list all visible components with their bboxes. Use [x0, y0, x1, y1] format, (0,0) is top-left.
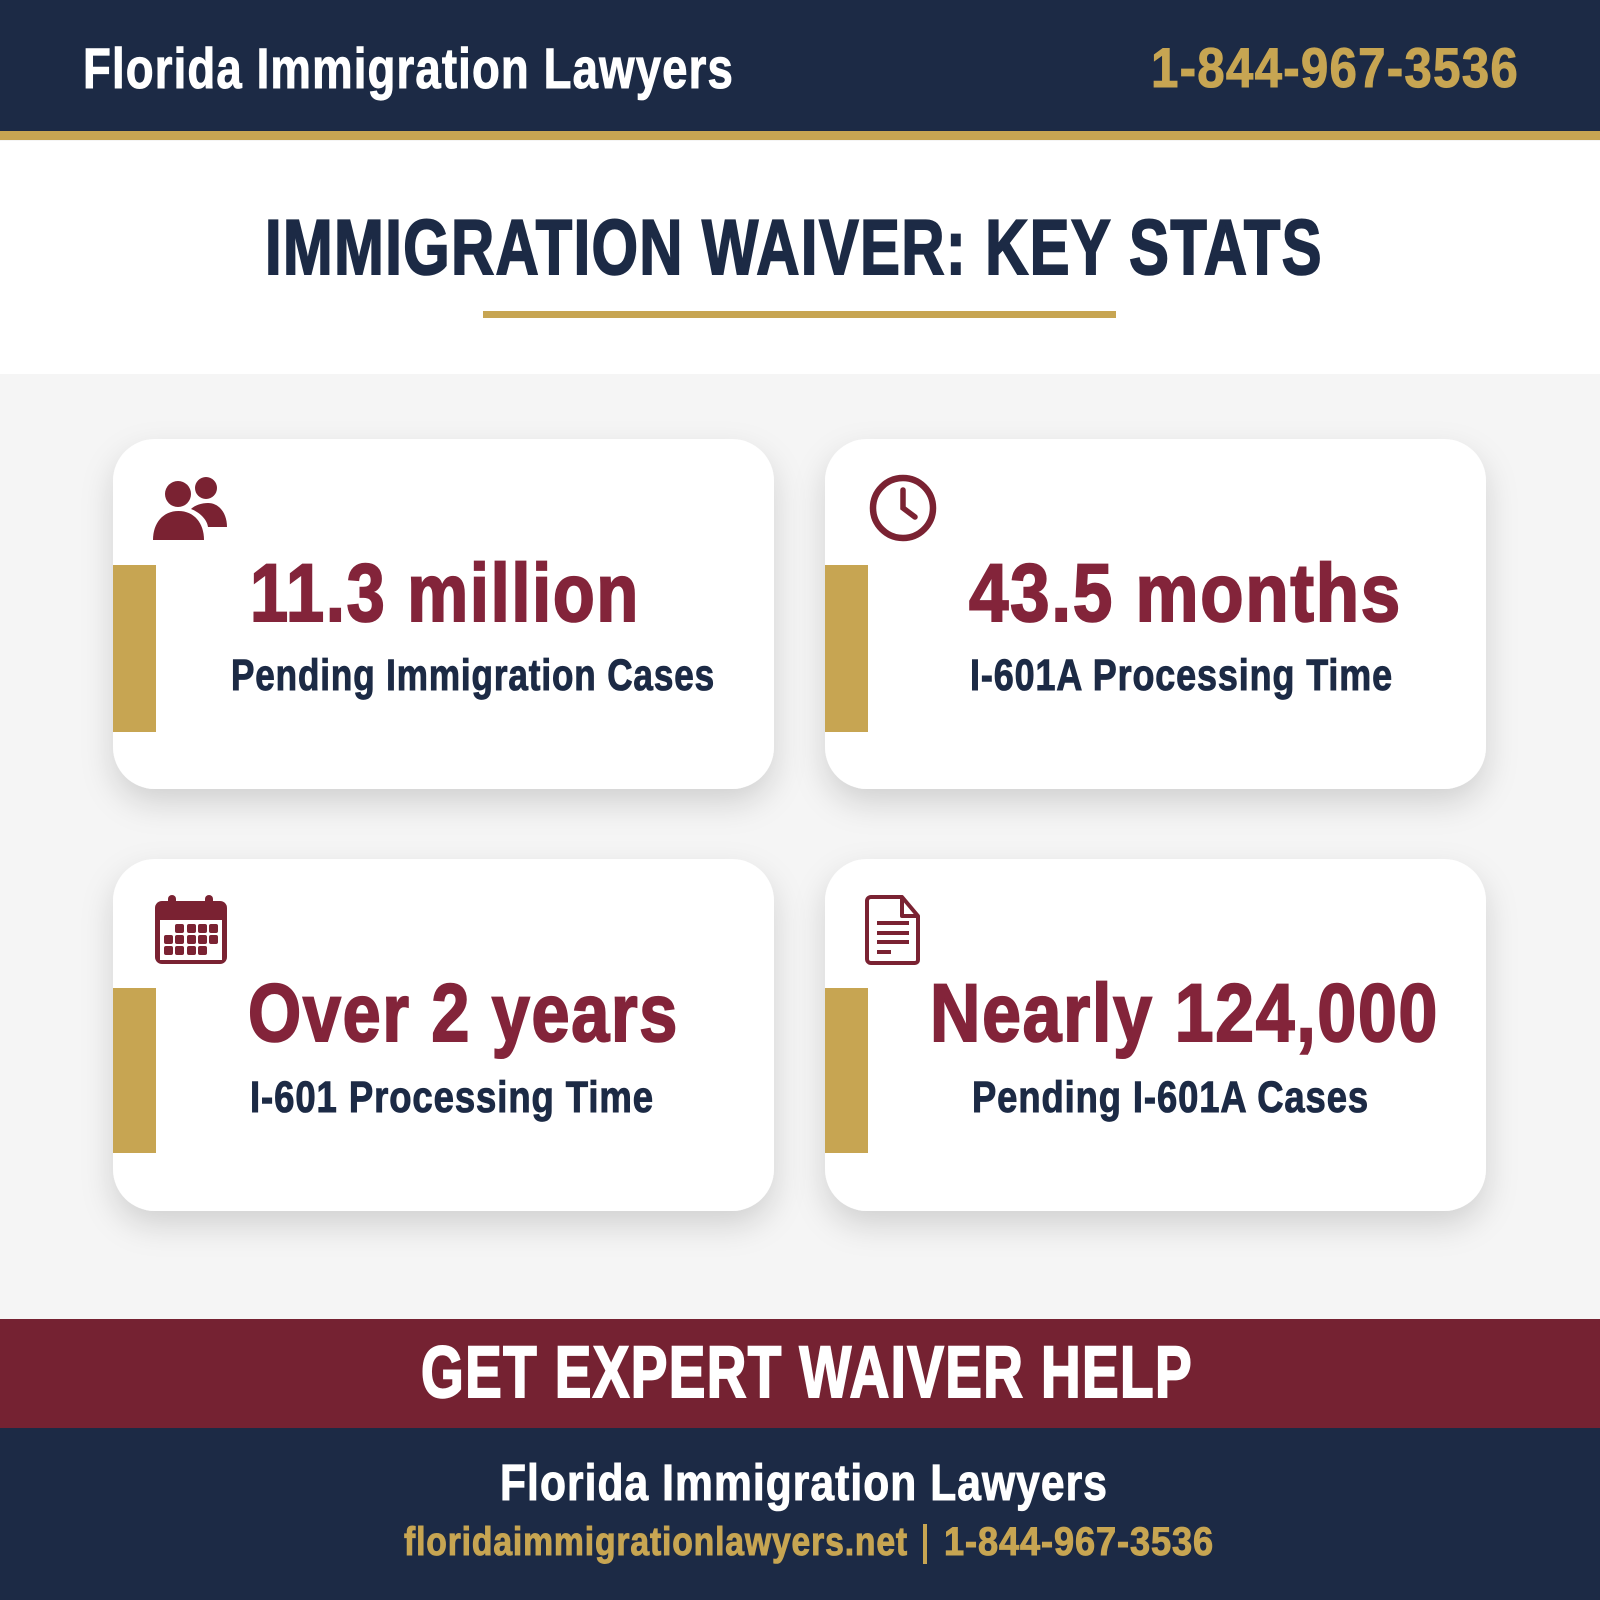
- footer: [0, 1428, 1600, 1600]
- stat label: I-601 Processing Time: [250, 1073, 654, 1122]
- panel: I-601A processing time: [825, 439, 1486, 789]
- title underline: [483, 311, 1116, 318]
- icon: document: [867, 897, 918, 963]
- panel: pending I-601A cases: [825, 859, 1486, 1211]
- gold accent bar: [825, 988, 868, 1153]
- gold accent bar: [113, 988, 156, 1153]
- white title area: [0, 141, 1600, 374]
- gold accent bar: [825, 565, 868, 732]
- panel: pending immigration cases: [113, 439, 774, 789]
- stat value: 11.3 million: [250, 548, 640, 639]
- stat value: 43.5 months: [969, 548, 1402, 639]
- call to action text: GET EXPERT WAIVER HELP: [421, 1332, 1193, 1413]
- call to action band: [0, 1319, 1600, 1428]
- header bar: [0, 0, 1600, 140]
- stat value: Over 2 years: [248, 968, 679, 1059]
- header firm name: Florida Immigration Lawyers: [83, 37, 734, 101]
- footer website and phone: 1-844-967-3536: [944, 1520, 1214, 1564]
- footer website and phone: floridaimmigrationlawyers.net: [404, 1520, 908, 1564]
- header phone number: 1-844-967-3536: [1151, 36, 1519, 99]
- stat label: I-601A Processing Time: [970, 651, 1393, 700]
- gold accent bar: [113, 565, 156, 732]
- stat label: Pending Immigration Cases: [231, 651, 715, 700]
- footer firm name: Florida Immigration Lawyers: [500, 1454, 1108, 1511]
- icon: clock: [873, 478, 933, 538]
- stat label: Pending I-601A Cases: [972, 1073, 1369, 1122]
- icon: calendar: [155, 895, 227, 964]
- icon: people: [153, 477, 227, 540]
- stat value: Nearly 124,000: [930, 968, 1439, 1059]
- panel: I-601 processing time: [113, 859, 774, 1211]
